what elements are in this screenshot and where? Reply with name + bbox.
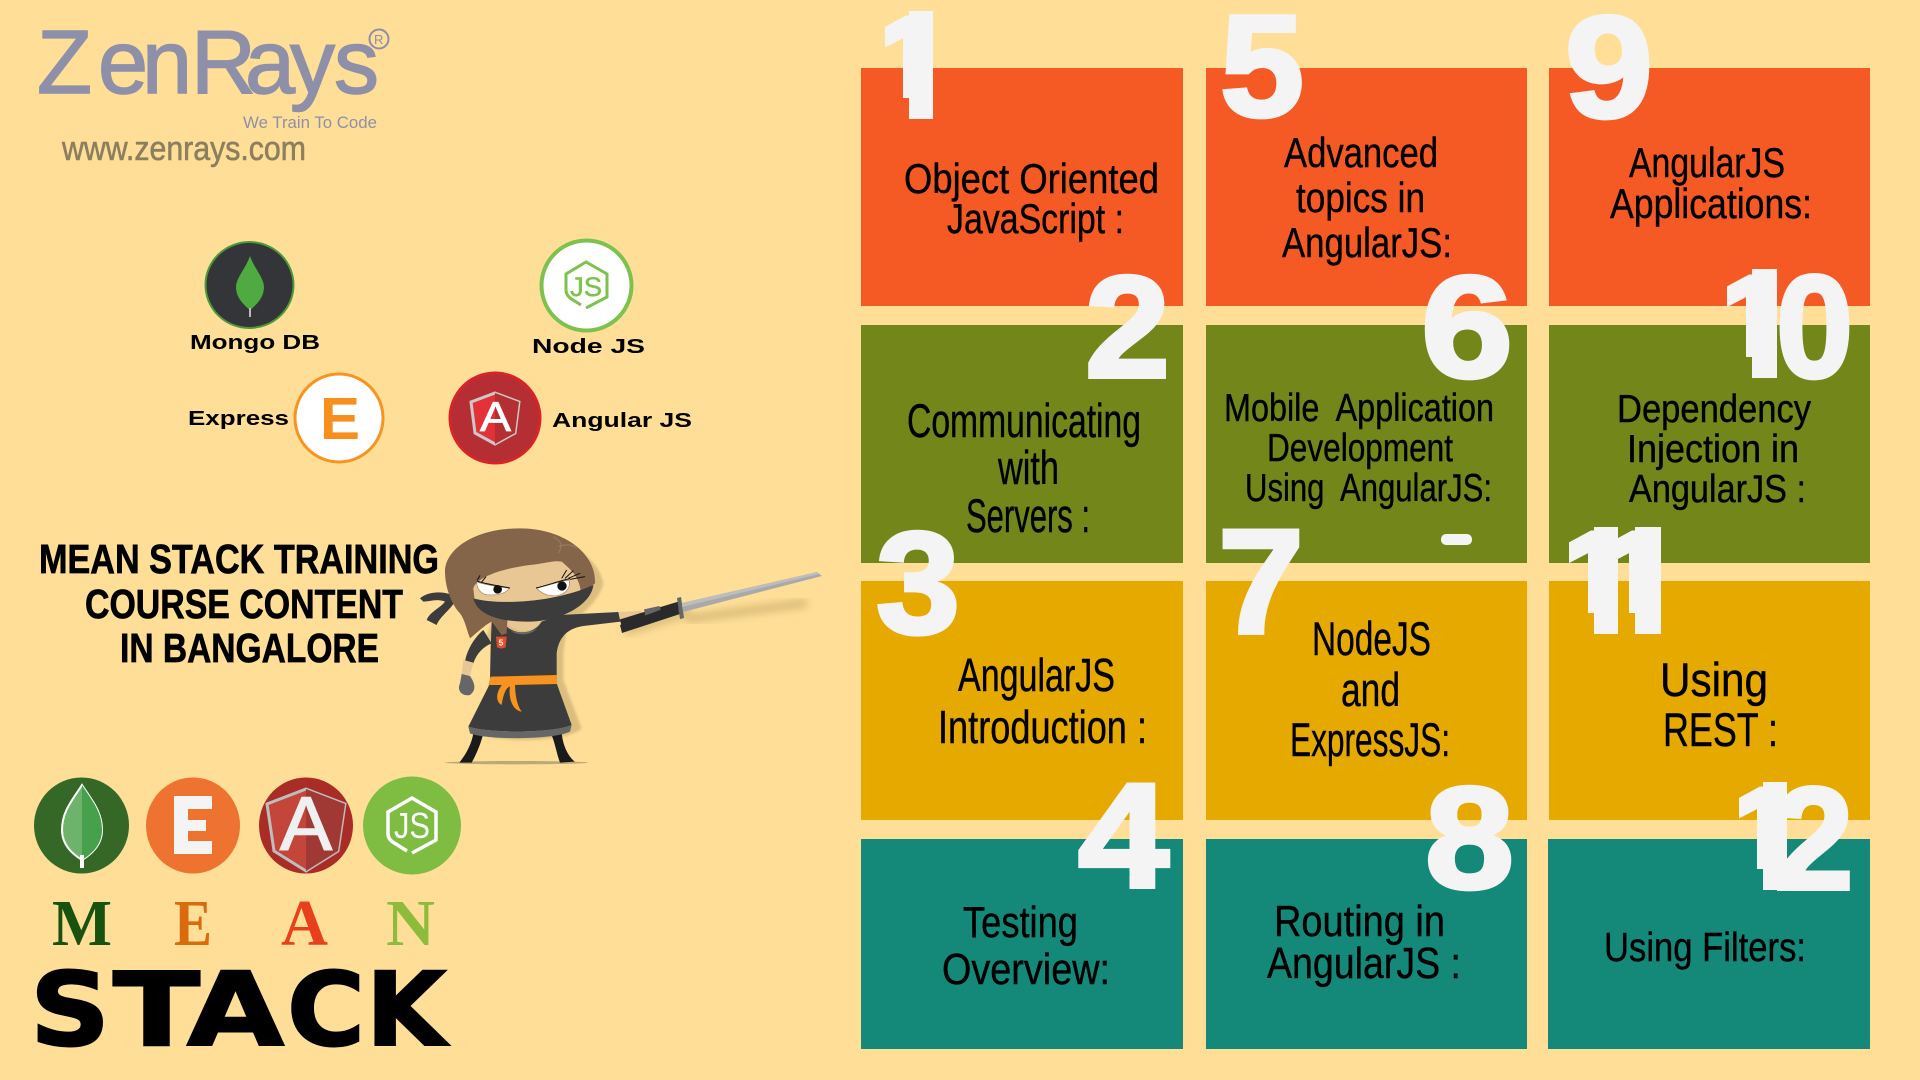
panel: topic 3: Introduction :	[938, 701, 1147, 753]
icon: Express	[295, 374, 383, 462]
number 12: 2	[1774, 757, 1854, 920]
website url: www.zenrays.com	[61, 130, 306, 168]
icon: Node badge: JS	[394, 805, 430, 846]
panel: topic 12	[1548, 839, 1870, 1049]
panel: topic 8: Routing in	[1274, 897, 1445, 946]
panel: topic 6	[1206, 325, 1527, 563]
heading: STACK: S	[30, 951, 110, 1070]
panel: topic 6: Mobile Application	[1224, 387, 1494, 430]
icon: Express badge	[146, 778, 240, 874]
heading: MEAN letters: M	[52, 887, 112, 960]
label: Mongo DB: Mongo DB	[190, 332, 320, 354]
panel: topic 6: Using AngularJS:	[1245, 467, 1492, 510]
number 6: 6	[1421, 246, 1513, 408]
icon: Mongo DB	[206, 242, 294, 328]
number 11	[1569, 527, 1661, 634]
number 11: 1	[1550, 502, 1647, 665]
panel: topic 10: Injection in	[1627, 428, 1799, 471]
panel: topic 1: Object Oriented	[904, 155, 1159, 202]
logo: ZenRays: R	[374, 32, 383, 47]
heading: STACK: T	[113, 951, 201, 1070]
panel: topic 1	[861, 68, 1183, 306]
heading: MEAN letters: N	[386, 887, 435, 960]
panel: topic 7	[1206, 581, 1527, 820]
label: Node JS: Node JS	[532, 336, 645, 358]
panel: topic 2: Communicating	[907, 394, 1141, 447]
icon: Angular badge	[259, 778, 353, 874]
panel: topic 4	[861, 839, 1183, 1049]
number 12: 1	[1718, 758, 1816, 921]
number 12	[1739, 782, 1850, 891]
number 1	[885, 11, 933, 119]
panel: topic 10	[1549, 325, 1870, 563]
panel: topic 4: Testing	[963, 898, 1078, 947]
panel: topic 1: JavaScript :	[947, 195, 1124, 242]
icon: Node JS	[542, 240, 632, 330]
number 7: 7	[1218, 498, 1304, 665]
panel: topic 4: Overview:	[942, 945, 1110, 994]
panel: topic 9: AngularJS	[1629, 139, 1785, 186]
label: Angular JS: Angular JS	[552, 410, 692, 432]
panel: topic 5: AngularJS:	[1282, 219, 1452, 266]
heading: MEAN letters	[52, 887, 435, 960]
logo: ZenRays: ZenRays	[37, 13, 379, 113]
number 4: 4	[1078, 752, 1169, 919]
panel: topic 3	[861, 581, 1183, 820]
icon: Node JS: JS	[570, 272, 602, 302]
panel: topic 6: Development	[1267, 427, 1453, 470]
heading: course title: MEAN STACK TRAINING	[39, 536, 439, 582]
panel: topic 7: NodeJS	[1312, 612, 1431, 665]
number 3: 3	[876, 502, 960, 664]
number 10: 1	[1708, 246, 1805, 409]
label: Express: Express	[188, 408, 289, 430]
illustration: ninja with sword: 5	[499, 638, 504, 648]
number 11: 1	[1590, 502, 1688, 665]
panel: topic 2: with	[997, 441, 1059, 494]
panel: topic 2	[861, 325, 1183, 563]
panel: topic 10: AngularJS :	[1629, 468, 1806, 511]
panel: topic 5: topics in	[1296, 174, 1425, 221]
panel: topic 11	[1549, 581, 1870, 820]
heading: MEAN letters: A	[281, 887, 328, 960]
panel: topic 9	[1549, 68, 1870, 306]
panel: topic 2: Servers :	[966, 489, 1090, 542]
number 10	[1727, 269, 1850, 380]
panel: topic 7: ExpressJS:	[1290, 713, 1450, 766]
panel: topic 7: and	[1341, 663, 1400, 716]
illustration: ninja with sword	[420, 528, 822, 764]
heading: MEAN letters: E	[174, 887, 212, 960]
panel: topic 5	[1206, 68, 1527, 306]
number 2: 2	[1085, 246, 1170, 408]
panel: topic 12: Using Filters:	[1604, 924, 1806, 970]
panel: topic 3: AngularJS	[958, 649, 1115, 701]
number 8: 8	[1425, 757, 1514, 919]
panel: topic 8: AngularJS :	[1267, 939, 1461, 988]
icon: Express: E	[320, 386, 360, 452]
panel: topic 8	[1206, 839, 1527, 1049]
icon: MongoDB badge	[34, 778, 129, 874]
icon: Angular badge: A	[280, 782, 332, 867]
heading: STACK: A	[187, 951, 284, 1070]
number 10: 0	[1776, 246, 1853, 409]
heading: STACK	[30, 951, 450, 1070]
logo: ZenRays: We Train To Code	[243, 113, 377, 132]
heading: STACK: K	[366, 951, 450, 1070]
heading: course title	[39, 536, 439, 671]
panel: topic 11: Using	[1660, 653, 1768, 706]
panel: topic 5: Advanced	[1284, 129, 1438, 176]
icon: Angular JS	[450, 373, 540, 463]
heading: STACK: C	[287, 951, 365, 1070]
icon: Angular JS: A	[480, 393, 511, 440]
panel: topic 10: Dependency	[1617, 388, 1811, 431]
heading: course title: COURSE CONTENT	[85, 581, 403, 627]
panel: topic 9: Applications:	[1610, 180, 1812, 227]
icon: Node badge	[363, 776, 461, 874]
heading: course title: IN BANGALORE	[120, 625, 379, 671]
panel: topic 11: REST :	[1663, 703, 1778, 756]
